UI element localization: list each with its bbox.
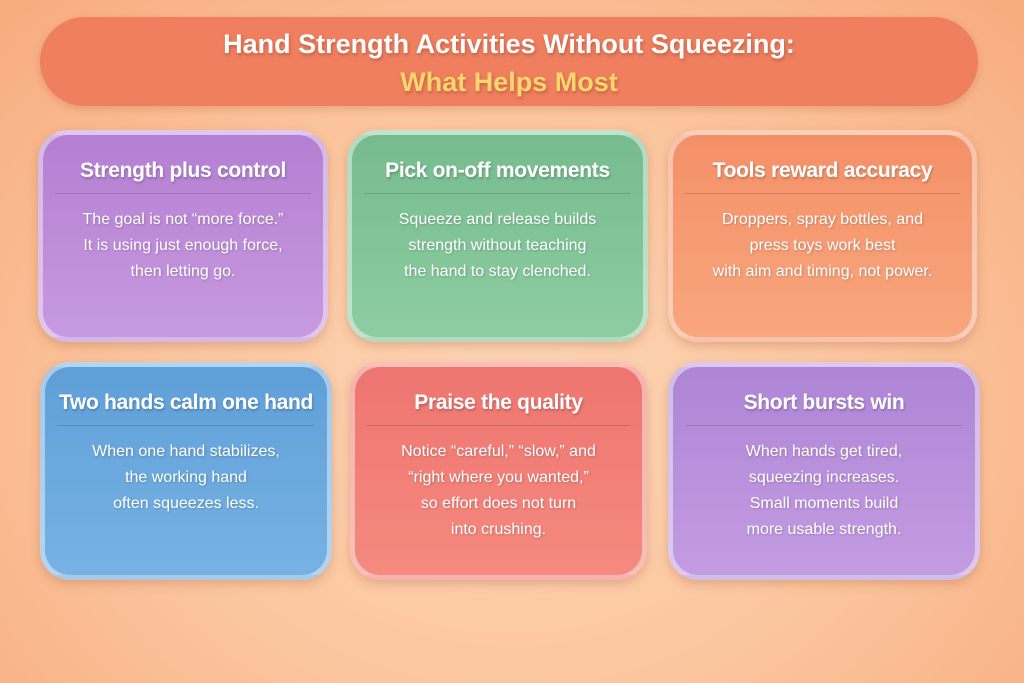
panel: strength plus control: It is using just enough force,: [83, 237, 283, 254]
panel: tools reward accuracy: Tools reward accuracy: [713, 159, 932, 182]
panel: short bursts win: squeezing increases.: [749, 469, 899, 486]
title: What Helps Most: [400, 67, 618, 97]
panel: tools reward accuracy: [668, 130, 977, 342]
panel: short bursts win: When hands get tired,: [746, 443, 902, 460]
panel: two hands calm one hand: often squeezes less.: [113, 495, 259, 512]
panel: short bursts win: [668, 362, 980, 580]
panel: two hands calm one hand: When one hand stabilizes,: [92, 443, 280, 460]
panel: praise the quality: [350, 362, 647, 580]
title: [40, 17, 978, 106]
panel: two hands calm one hand: [40, 362, 332, 580]
panel: pick on-off movements: [347, 130, 648, 342]
panel: strength plus control: then letting go.: [131, 263, 235, 280]
panel: short bursts win: Small moments build: [750, 495, 898, 512]
panel: tools reward accuracy: Droppers, spray bottles, and: [722, 211, 923, 228]
panel: praise the quality: so effort does not turn: [421, 495, 576, 512]
panel: strength plus control: The goal is not “more force.”: [83, 211, 283, 228]
panel: tools reward accuracy: press toys work best: [750, 237, 895, 254]
panel: praise the quality: Praise the quality: [414, 391, 583, 414]
panel: two hands calm one hand: Two hands calm one hand: [59, 391, 313, 414]
panel: pick on-off movements: the hand to stay clenched.: [404, 263, 591, 280]
panel: praise the quality: Notice “careful,” “slow,” and: [401, 443, 596, 460]
panel: strength plus control: Strength plus control: [80, 159, 286, 182]
panel: strength plus control: [38, 130, 328, 342]
panel: praise the quality: “right where you wanted,”: [408, 469, 589, 486]
panel: pick on-off movements: Squeeze and release builds: [399, 211, 596, 228]
panel: praise the quality: into crushing.: [451, 521, 546, 538]
panel: pick on-off movements: Pick on-off movements: [385, 159, 610, 182]
panel: two hands calm one hand: the working hand: [125, 469, 247, 486]
panel: pick on-off movements: strength without teaching: [409, 237, 586, 254]
panel: short bursts win: more usable strength.: [747, 521, 901, 538]
panel: short bursts win: Short bursts win: [744, 391, 904, 414]
panel: tools reward accuracy: with aim and timing, not power.: [713, 263, 932, 280]
title: Hand Strength Activities Without Squeezing:: [223, 29, 795, 59]
